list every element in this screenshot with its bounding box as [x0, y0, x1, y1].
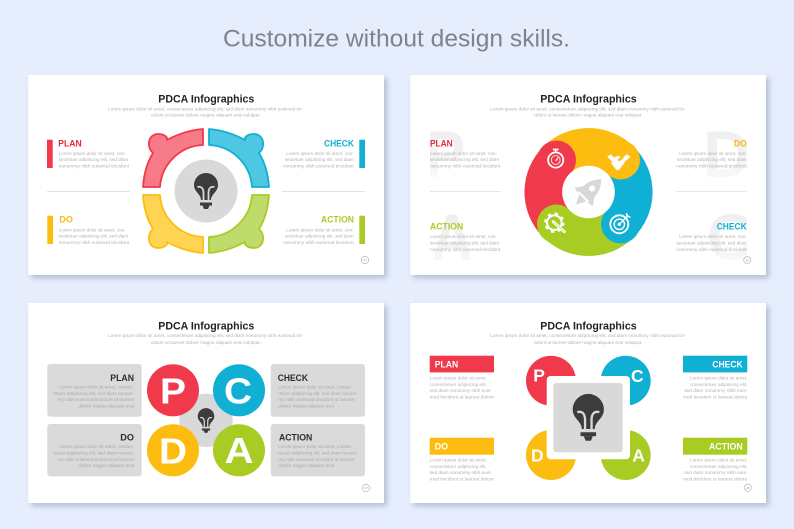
check block: CHECK	[324, 139, 354, 149]
centre circle	[179, 394, 233, 447]
plan block: Lorem ipsum dolor sit amet,	[430, 376, 487, 380]
do card: DO	[120, 432, 134, 442]
action block: sectetuer adipiscing elit, sed diam	[430, 240, 499, 246]
do card: my nibh euismod tincidunt ut laoreet	[57, 457, 135, 462]
icon: target	[610, 213, 630, 233]
quarter circle P	[526, 356, 576, 406]
do block: nonummy nibh euismod tincidunt	[676, 163, 747, 168]
action card: tetuer adipiscing elit, sed diam nonum-	[278, 450, 358, 456]
slide subtitle: cidunt ut laoreet dolore magna aliquam erat volutpat.	[151, 340, 261, 345]
do block: consectetuer adipiscing elit,	[430, 464, 487, 469]
plan card	[47, 364, 142, 417]
do block: mod tincidunt ut laoreet dolore	[430, 476, 494, 481]
do block: DO	[435, 442, 448, 452]
page number: 25	[746, 258, 749, 262]
plan block: PLAN	[430, 138, 453, 148]
letter circle C: C	[224, 370, 252, 412]
check block: nonummy nibh euismod tincidunt	[283, 163, 354, 168]
do block: DO	[734, 138, 747, 148]
action block	[683, 438, 748, 481]
letter circle A: A	[224, 430, 254, 471]
page number	[361, 256, 369, 264]
slide title: PDCA Infographics	[540, 93, 637, 105]
check block: Lorem ipsum dolor sit amet,	[690, 376, 747, 380]
action block: Lorem ipsum dolor sit amet, con-	[286, 228, 354, 232]
action block: Lorem ipsum dolor sit amet, con-	[430, 234, 497, 239]
plan block: mod tincidunt ut laoreet dolore	[430, 394, 494, 399]
do block	[430, 438, 494, 481]
do block: DO	[59, 215, 73, 225]
heading: Customize without design skills.	[223, 26, 570, 52]
page number	[744, 257, 751, 264]
letter D: D	[531, 446, 544, 466]
watermark letters: A	[431, 200, 473, 274]
segment: plan	[143, 129, 203, 187]
icon: rocket	[567, 170, 610, 214]
action card	[271, 424, 365, 476]
action card: my nibh euismod tincidunt ut laoreet	[278, 457, 355, 462]
panel: swirl donut slide	[410, 75, 766, 275]
centre circle	[174, 160, 238, 222]
segment: check	[209, 129, 269, 187]
slide subtitle: cidunt ut laoreet dolore magna aliquam erat volutpat.	[534, 112, 642, 118]
icon: handshake	[607, 154, 630, 170]
action block	[430, 222, 501, 252]
action card: Lorem ipsum dolor sit amet, consec-	[278, 444, 354, 449]
do card: dolore magna aliquam erat	[78, 463, 135, 468]
plan block	[47, 139, 130, 168]
icon: stopwatch	[548, 150, 563, 168]
check block: Lorem ipsum dolor sit amet, con-	[679, 234, 747, 239]
slide subtitle: Lorem ipsum dolor sit amet, consectetuer adipiscing elit, sed diam nonummy nibh euismod tin-	[490, 106, 686, 111]
check card: dolore magna aliquam erat	[278, 404, 335, 408]
panel: quadrant arcs slide	[28, 75, 384, 275]
slide subtitle: cidunt ut laoreet dolore magna aliquam erat volutpat.	[534, 340, 642, 345]
letter circle P	[147, 364, 199, 416]
do block: Lorem ipsum dolor sit amet,	[430, 458, 487, 462]
plan block	[430, 356, 494, 399]
do card: tetuer adipiscing elit, sed diam nonum-	[53, 450, 134, 456]
do block: Lorem ipsum dolor sit amet, con-	[679, 151, 747, 156]
action block: mod tincidunt ut laoreet dolore	[683, 476, 748, 481]
page number: 28	[746, 486, 750, 490]
check block: Lorem ipsum dolor sit amet, con-	[286, 151, 354, 156]
quarter circle C	[601, 356, 651, 406]
panel: letter circles slide	[28, 303, 384, 503]
plan block: Lorem ipsum dolor sit amet, con-	[59, 151, 126, 156]
letter circle C	[213, 364, 265, 416]
action card: dolore magna aliquam erat	[278, 463, 335, 468]
check block: sed diam nonummy nibh euis-	[684, 388, 748, 393]
segment: do	[143, 195, 203, 253]
action block: sed diam nonummy nibh euis-	[684, 470, 748, 475]
check card: CHECK	[278, 373, 308, 383]
check block	[283, 139, 365, 168]
do block: nonummy nibh euismod tincidunt	[59, 240, 130, 245]
action block: ACTION	[321, 215, 354, 225]
slide title: PDCA Infographics	[158, 93, 254, 105]
check block: sectetuer adipiscing elit, sed diam	[285, 157, 354, 162]
watermark letters: P	[425, 117, 465, 191]
check card: my nibh euismod tincidunt ut laoreet	[278, 397, 355, 402]
slide subtitle: Lorem ipsum dolor sit amet, consectetuer adipiscing elit, sed diam nonummy nibh euismod tin-	[108, 333, 303, 338]
plan block: sed diam nonummy nibh euis-	[430, 388, 492, 393]
slide subtitle: Lorem ipsum dolor sit amet, consectetuer adipiscing elit, sed diam nonummy nibh euismod tin-	[108, 106, 303, 111]
do block: Lorem ipsum dolor sit amet, con-	[59, 228, 126, 232]
quarter circle D	[526, 430, 576, 480]
page number	[744, 484, 751, 491]
page number: 27	[364, 486, 368, 490]
action block: nonummy nibh euismod tincidunt	[430, 247, 501, 252]
page number: 24	[363, 258, 367, 262]
do card: Lorem ipsum dolor sit amet, consec-	[59, 444, 134, 449]
check block	[683, 356, 748, 399]
slide subtitle	[108, 106, 303, 118]
plan card: my nibh euismod tincidunt ut laoreet	[57, 397, 135, 402]
letter C: C	[631, 366, 644, 386]
panel: framed bulb slide	[410, 303, 766, 503]
slide subtitle: Lorem ipsum dolor sit amet, consectetuer adipiscing elit, sed diam nonummy nibh euismod tin-	[490, 333, 686, 338]
page number	[362, 484, 370, 492]
do block: sectetuer adipiscing elit, sed diam	[677, 157, 747, 162]
plan block: sectetuer adipiscing elit, sed diam	[430, 157, 499, 162]
centre frame	[547, 376, 630, 459]
action block: Lorem ipsum dolor sit amet,	[690, 458, 747, 462]
quarter circle A	[601, 430, 651, 480]
segment: action	[209, 195, 269, 253]
check block: CHECK	[712, 359, 743, 369]
slide subtitle: cidunt ut laoreet dolore magna aliquam erat volutpat.	[151, 112, 261, 118]
icon: light bulb	[194, 173, 218, 209]
watermark letters: D	[703, 117, 751, 191]
slide subtitle	[490, 333, 686, 345]
plan card: dolore magna aliquam erat	[78, 404, 135, 408]
do block	[676, 138, 747, 168]
plan block: nonummy nibh euismod tincidunt	[59, 163, 130, 168]
letter circle D	[147, 424, 199, 476]
letter circle A	[213, 424, 265, 476]
watermark letters: C	[707, 200, 755, 274]
icon: light bulb	[198, 408, 214, 433]
plan card: tetuer adipiscing elit, sed diam nonum-	[53, 391, 134, 396]
check block: sectetuer adipiscing elit, sed diam	[677, 240, 747, 246]
watermark letters	[430, 132, 746, 256]
letter circle D: D	[159, 430, 187, 472]
action card: ACTION	[279, 432, 313, 442]
check block: consectetuer adipiscing elit,	[690, 382, 747, 387]
do block: sed diam nonummy nibh euis-	[430, 470, 492, 475]
slide subtitle	[490, 106, 686, 118]
do block	[47, 215, 130, 245]
action block: nonummy nibh euismod tincidunt	[283, 240, 354, 245]
slide subtitle	[108, 333, 303, 345]
plan block: nonummy nibh euismod tincidunt	[430, 163, 501, 168]
check block: nonummy nibh euismod tincidunt	[676, 247, 747, 252]
check block	[676, 222, 747, 252]
do block: sectetuer adipiscing elit, sed diam	[59, 234, 128, 239]
letter circle P: P	[160, 370, 186, 412]
action block: ACTION	[709, 442, 743, 452]
slide title: PDCA Infographics	[540, 321, 637, 333]
plan card: Lorem ipsum dolor sit amet, consec-	[59, 385, 134, 390]
letter P: P	[533, 366, 545, 386]
plan block: sectetuer adipiscing elit, sed diam	[59, 157, 128, 162]
plan block: consectetuer adipiscing elit,	[430, 382, 487, 387]
check block: mod tincidunt ut laoreet dolore	[683, 394, 748, 399]
plan block	[430, 138, 501, 168]
action block	[283, 215, 365, 245]
plan block: PLAN	[58, 139, 82, 149]
check block: CHECK	[717, 222, 747, 232]
letter A: A	[632, 446, 645, 466]
icon: light bulb	[573, 394, 604, 441]
slide title: PDCA Infographics	[158, 321, 254, 333]
check card: Lorem ipsum dolor sit amet, consec-	[278, 385, 354, 390]
plan block: Lorem ipsum dolor sit amet, con-	[430, 151, 497, 156]
plan block: PLAN	[435, 359, 459, 369]
action block: sectetuer adipiscing elit, sed diam	[285, 234, 354, 239]
plan card: PLAN	[110, 373, 134, 383]
action block: consectetuer adipiscing elit,	[690, 464, 747, 469]
check card: tetuer adipiscing elit, sed diam nonum-	[278, 391, 358, 396]
action block: ACTION	[430, 222, 464, 232]
donut chart	[524, 128, 653, 256]
do card	[47, 424, 142, 476]
icon: gear and wrench	[545, 214, 564, 232]
check card	[271, 364, 365, 417]
